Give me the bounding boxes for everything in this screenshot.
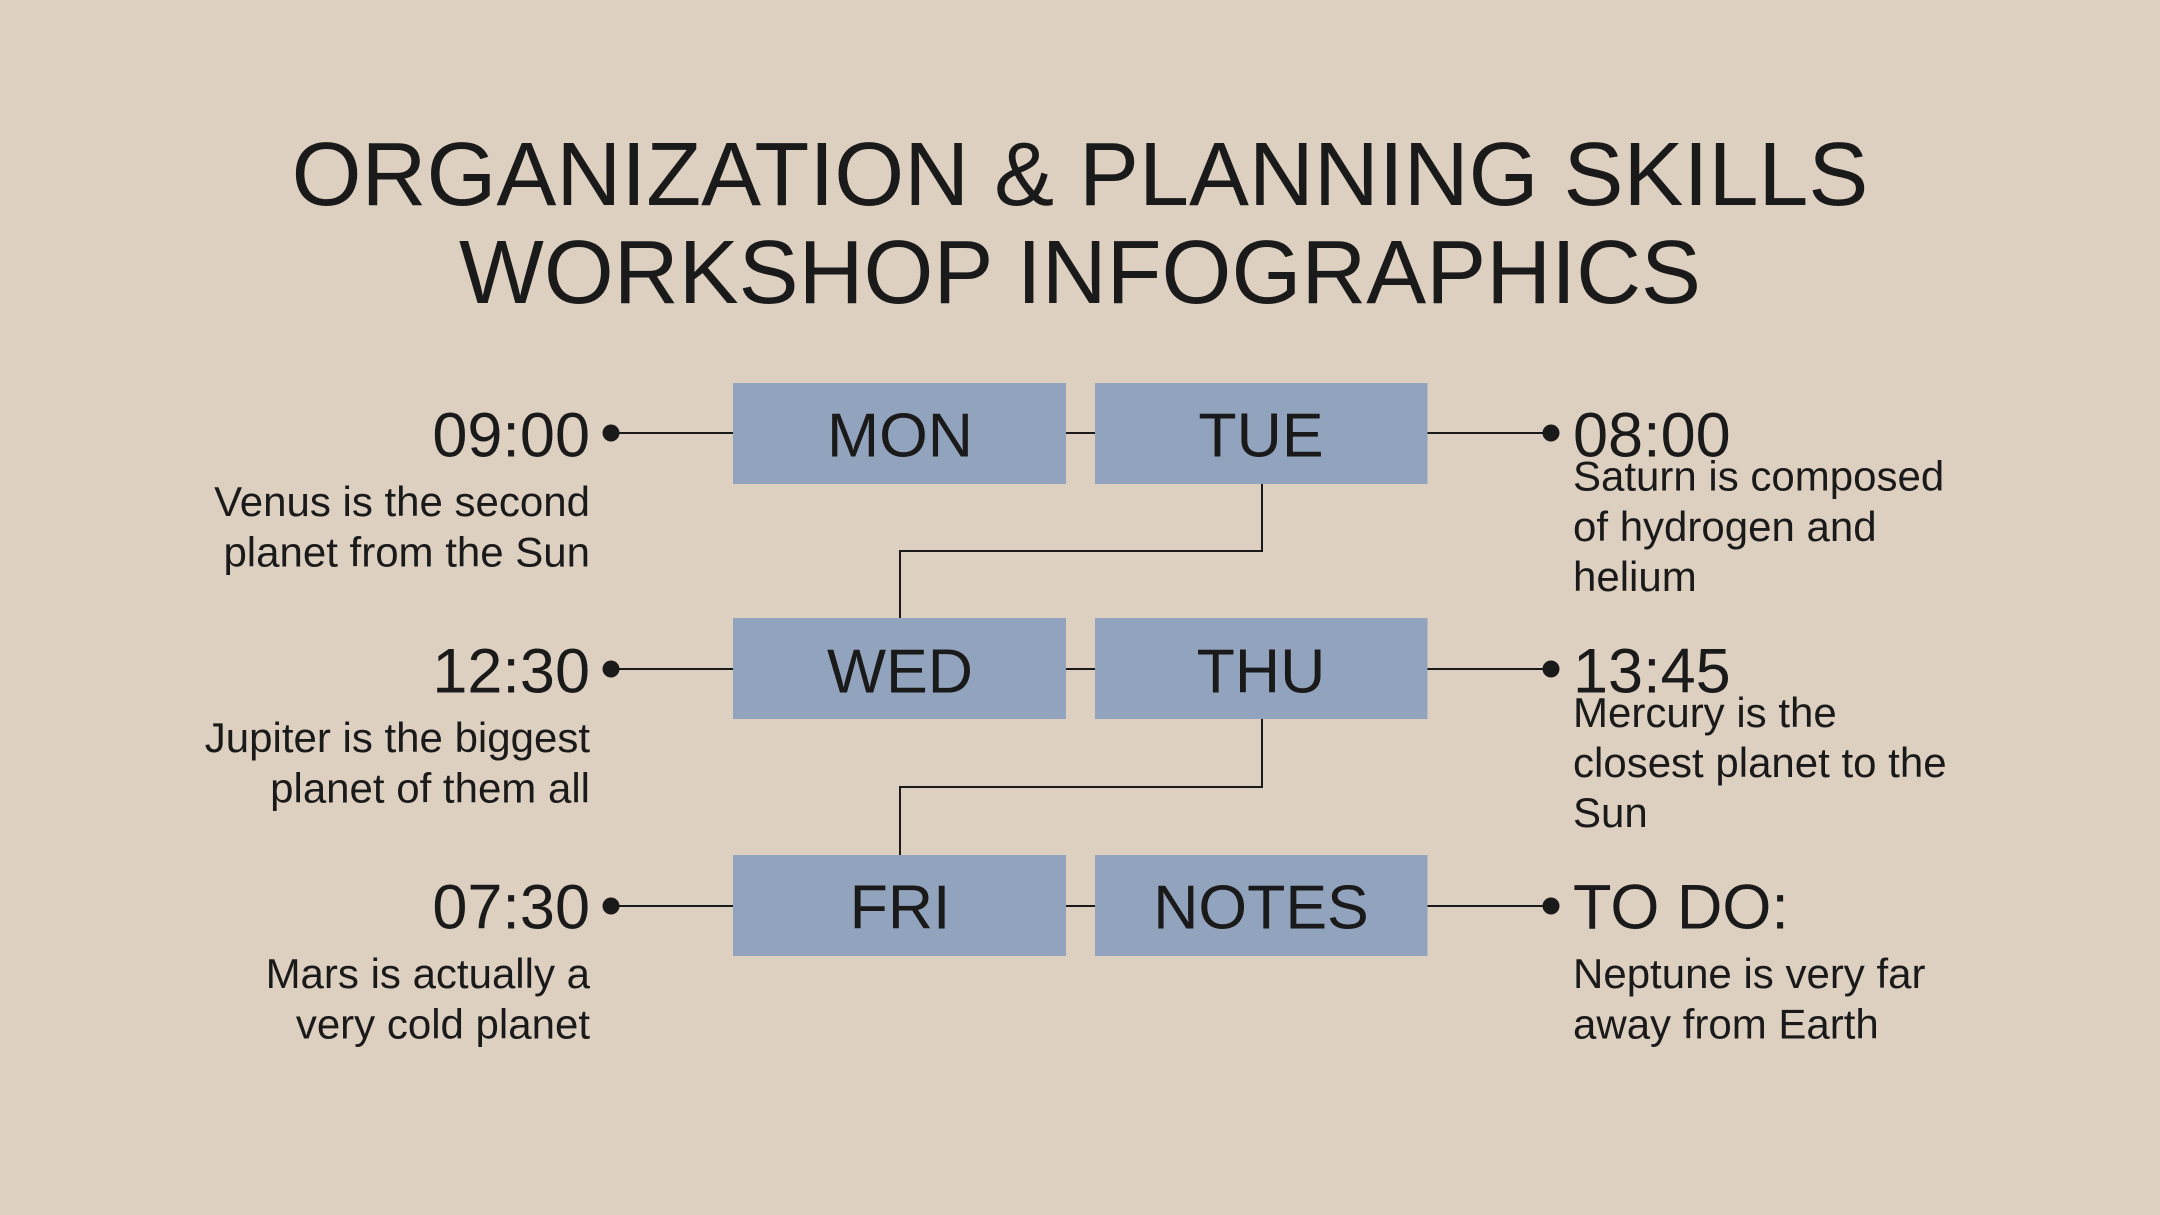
text block: Thursday 13:45: 13:45	[1573, 636, 1731, 706]
text block: Monday 09:00: planet from the Sun	[223, 528, 590, 576]
title: WORKSHOP INFOGRAPHICS	[459, 223, 1701, 323]
text block: Wednesday 12:30: 12:30	[432, 636, 590, 706]
text block: Thursday 13:45: Sun	[1573, 789, 1648, 836]
box: THU: THU	[1197, 636, 1325, 706]
box: THU	[1095, 618, 1428, 719]
box: FRI: FRI	[850, 872, 950, 942]
text block: Tuesday 08:00: of hydrogen and	[1573, 503, 1877, 550]
text block: Thursday 13:45: Mercury is the	[1573, 689, 1837, 736]
title: ORGANIZATION & PLANNING SKILLS	[292, 125, 1868, 225]
box: WED: WED	[827, 636, 973, 706]
text block: Notes to do: Neptune is very far	[1573, 950, 1926, 997]
dot: Monday	[602, 424, 620, 442]
text block: Thursday 13:45: closest planet to the	[1573, 739, 1947, 786]
box: MON	[733, 383, 1066, 484]
text block: Notes to do: away from Earth	[1573, 1000, 1879, 1048]
text block: Notes to do: TO DO:	[1573, 872, 1789, 942]
box: WED	[733, 618, 1066, 719]
text block: Tuesday 08:00	[1573, 400, 1944, 600]
text block: Monday 09:00: Venus is the second	[214, 478, 590, 525]
text block: Wednesday 12:30	[205, 636, 590, 812]
title	[292, 125, 1868, 323]
text block: Monday 09:00	[214, 400, 590, 576]
box: NOTES	[1095, 855, 1428, 956]
box: TUE	[1095, 383, 1428, 484]
box: TUE: TUE	[1198, 400, 1324, 470]
text block: Tuesday 08:00: 08:00	[1573, 400, 1731, 470]
text block: Friday 07:30	[266, 872, 591, 1048]
text block: Wednesday 12:30: planet of them all	[270, 764, 590, 812]
text block: Tuesday 08:00: Saturn is composed	[1573, 452, 1944, 500]
connector lines	[610, 433, 1551, 906]
text block: Thursday 13:45	[1573, 636, 1947, 836]
text block: Notes to do	[1573, 872, 1926, 1048]
dot: Notes	[1542, 898, 1560, 914]
dot: Wednesday	[602, 660, 620, 678]
text block: Monday 09:00: 09:00	[432, 400, 590, 470]
dot: Friday	[602, 898, 620, 914]
text block: Tuesday 08:00: helium	[1573, 553, 1697, 600]
dot: Thursday	[1542, 660, 1560, 678]
text block: Friday 07:30: Mars is actually a	[266, 950, 591, 997]
box: NOTES: NOTES	[1153, 872, 1369, 942]
text block: Friday 07:30: 07:30	[432, 872, 590, 942]
text block: Friday 07:30: very cold planet	[296, 1000, 590, 1048]
box: FRI	[733, 855, 1066, 956]
box: MON: MON	[827, 400, 973, 470]
dot: Tuesday	[1542, 424, 1560, 442]
text block: Wednesday 12:30: Jupiter is the biggest	[205, 714, 590, 761]
